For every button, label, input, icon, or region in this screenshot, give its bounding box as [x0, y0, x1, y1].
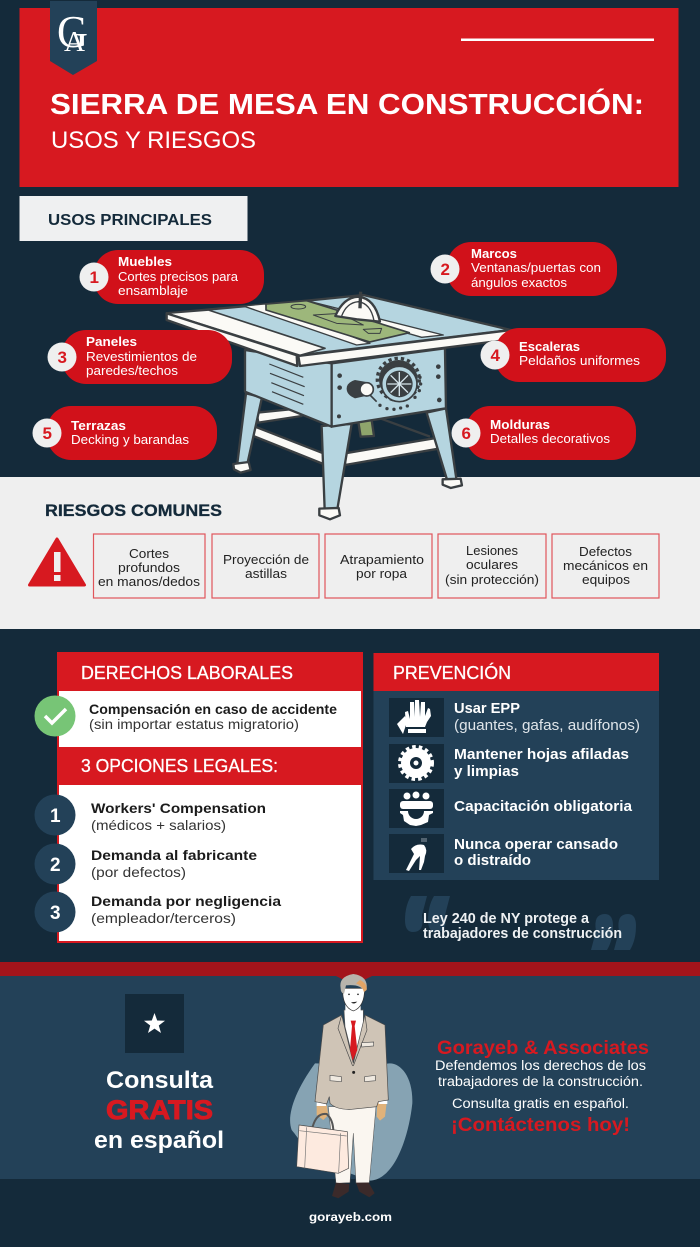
callout 5: terrazas: 5 [42, 424, 52, 443]
callout 5: terrazas: Terrazas [71, 419, 126, 433]
icon: star box [125, 994, 184, 1053]
callout 6: molduras: 6 [462, 424, 471, 443]
option 2: (por defectos) [91, 865, 186, 880]
icon: team with gear [389, 789, 444, 828]
option 2 [34, 844, 257, 884]
callout 3: paneles: Paneles [86, 335, 137, 349]
risk box 5: Defectos [579, 545, 632, 559]
option 3: 3 [50, 903, 61, 924]
heading: usos principales: USOS PRINCIPALES [48, 212, 212, 229]
text: mantener hojas [454, 747, 629, 780]
option 1: Workers' Compensation [91, 800, 266, 816]
option 3: (empleador/terceros) [91, 911, 236, 926]
light band: riesgos background [0, 477, 700, 629]
risk box 5: mecánicos en [563, 559, 648, 573]
risk box 5: equipos [582, 573, 630, 587]
illustration: table saw [167, 292, 512, 519]
text: usar epp [454, 701, 640, 734]
text: nunca operar: o distraído [454, 853, 531, 869]
text: compensación: Compensación en caso de accidente [89, 702, 338, 717]
callout 4: escaleras: Escaleras [519, 340, 580, 354]
header panel [20, 1, 678, 187]
risk box 1: profundos [118, 561, 180, 575]
icon: quotation marks [405, 896, 636, 950]
text: mantener hojas: Mantener hojas afiladas [454, 747, 629, 763]
option 3: Demanda por negligencia [91, 893, 281, 909]
icon: check [34, 696, 76, 736]
icon: tired worker [389, 834, 444, 873]
callout 3: paneles: Revestimientos de [86, 350, 197, 364]
illustration: businessman [290, 974, 412, 1198]
text: gorayeb & associates: Consulta gratis en español. [452, 1096, 629, 1111]
callout 1: muebles: Cortes precisos para [118, 270, 238, 284]
header rule [461, 38, 654, 41]
risk box 5 [552, 534, 659, 598]
callout 3: paneles: paredes/techos [86, 364, 178, 378]
panel: derechos laborales [34, 652, 363, 943]
text: website: gorayeb.com [309, 1210, 392, 1224]
subtitle: USOS Y RIESGOS [51, 127, 256, 154]
logo ribbon [50, 1, 97, 75]
text: nunca operar: Nunca operar cansado [454, 837, 618, 853]
text: gorayeb & associates: Defendemos los derechos de los [435, 1058, 646, 1073]
callout 1: muebles: ensamblaje [118, 284, 188, 298]
quote: ley 240: trabajadores de construcción [423, 926, 622, 942]
callout 1: muebles: Muebles [118, 255, 172, 269]
icon: glove [389, 698, 444, 737]
risk box 2: astillas [245, 567, 287, 581]
text: compensación [89, 702, 338, 732]
option 1 [34, 794, 266, 836]
callout 2: marcos: Marcos [471, 247, 517, 261]
callout 1: muebles [80, 250, 264, 304]
text: gorayeb & associates: ¡Contáctenos hoy! [451, 1115, 630, 1136]
risk box 3: por ropa [356, 567, 407, 581]
text: gorayeb & associates [435, 1038, 649, 1136]
callout 5: terrazas [32, 406, 217, 460]
text: capacitación: Capacitación obligatoria [454, 799, 633, 815]
callout 2: marcos: Ventanas/puertas con [471, 261, 601, 275]
risk box 3: Atrapamiento [340, 553, 424, 567]
heading: riesgos comunes: RIESGOS COMUNES [45, 501, 222, 520]
callout 3: paneles [48, 330, 232, 384]
risk box 2 [212, 534, 319, 598]
option 1: (médicos + salarios) [91, 818, 226, 833]
callout 4: escaleras: 4 [490, 346, 500, 365]
callout 2: marcos: ángulos exactos [471, 276, 567, 290]
logo ribbon: A [64, 26, 85, 58]
text: usar epp: Usar EPP [454, 701, 520, 717]
text: consulta gratis: Consulta [106, 1067, 214, 1094]
risk box 4: (sin protección) [445, 573, 539, 587]
logo ribbon: G [57, 6, 88, 57]
text: mantener hojas: y limpias [454, 764, 519, 780]
risk box 3 [325, 534, 432, 598]
callout 6: molduras: Detalles decorativos [490, 432, 610, 446]
callout 4: escaleras [480, 328, 666, 382]
heading: usos principales [20, 196, 248, 241]
option 3 [34, 892, 281, 932]
panel: prevención [374, 653, 659, 880]
text: consulta gratis: en español [94, 1127, 224, 1154]
icon: warning triangle [30, 539, 84, 585]
text: nunca operar [454, 837, 618, 869]
callout 6: molduras: Molduras [490, 418, 550, 432]
option 2: 2 [50, 855, 61, 876]
callout 2: marcos: 2 [440, 260, 450, 279]
callout 1: muebles: 1 [90, 268, 99, 287]
title: SIERRA DE MESA EN CONSTRUCCIÓN: [50, 89, 644, 121]
quote: ley 240 [405, 896, 636, 950]
text: consulta gratis: GRATIS [106, 1095, 213, 1125]
text: compensación: (sin importar estatus migratorio) [89, 717, 299, 732]
risk box 4 [438, 534, 546, 598]
text: usar epp: (guantes, gafas, audífonos) [454, 718, 640, 734]
callout 2: marcos [430, 242, 617, 296]
callout 3: paneles: 3 [58, 348, 67, 367]
callout 4: escaleras: Peldaños uniformes [519, 354, 640, 368]
text: gorayeb & associates: trabajadores de la construcción. [438, 1074, 643, 1089]
callout 5: terrazas: Decking y barandas [71, 433, 189, 447]
icon: saw blade [389, 744, 444, 783]
text: consulta gratis [94, 1067, 224, 1154]
option 1: 1 [50, 806, 61, 827]
risk box 1: Cortes [129, 547, 169, 561]
heading: prevención: PREVENCIÓN [393, 662, 511, 683]
heading: derechos laborales: DERECHOS LABORALES [81, 663, 293, 683]
callout 6: molduras [452, 406, 636, 460]
footer band [0, 962, 700, 1247]
heading: opciones legales: 3 OPCIONES LEGALES: [81, 756, 278, 776]
risk box 1: en manos/dedos [98, 575, 200, 589]
option 2: Demanda al fabricante [91, 847, 257, 863]
risk box 2: Proyección de [223, 553, 309, 567]
text: gorayeb & associates: Gorayeb & Associates [437, 1038, 649, 1059]
risk box 4: Lesiones [466, 544, 518, 558]
risk box 4: oculares [466, 558, 518, 572]
quote: ley 240: Ley 240 de NY protege a [423, 911, 590, 927]
risk box 1 [94, 534, 205, 598]
